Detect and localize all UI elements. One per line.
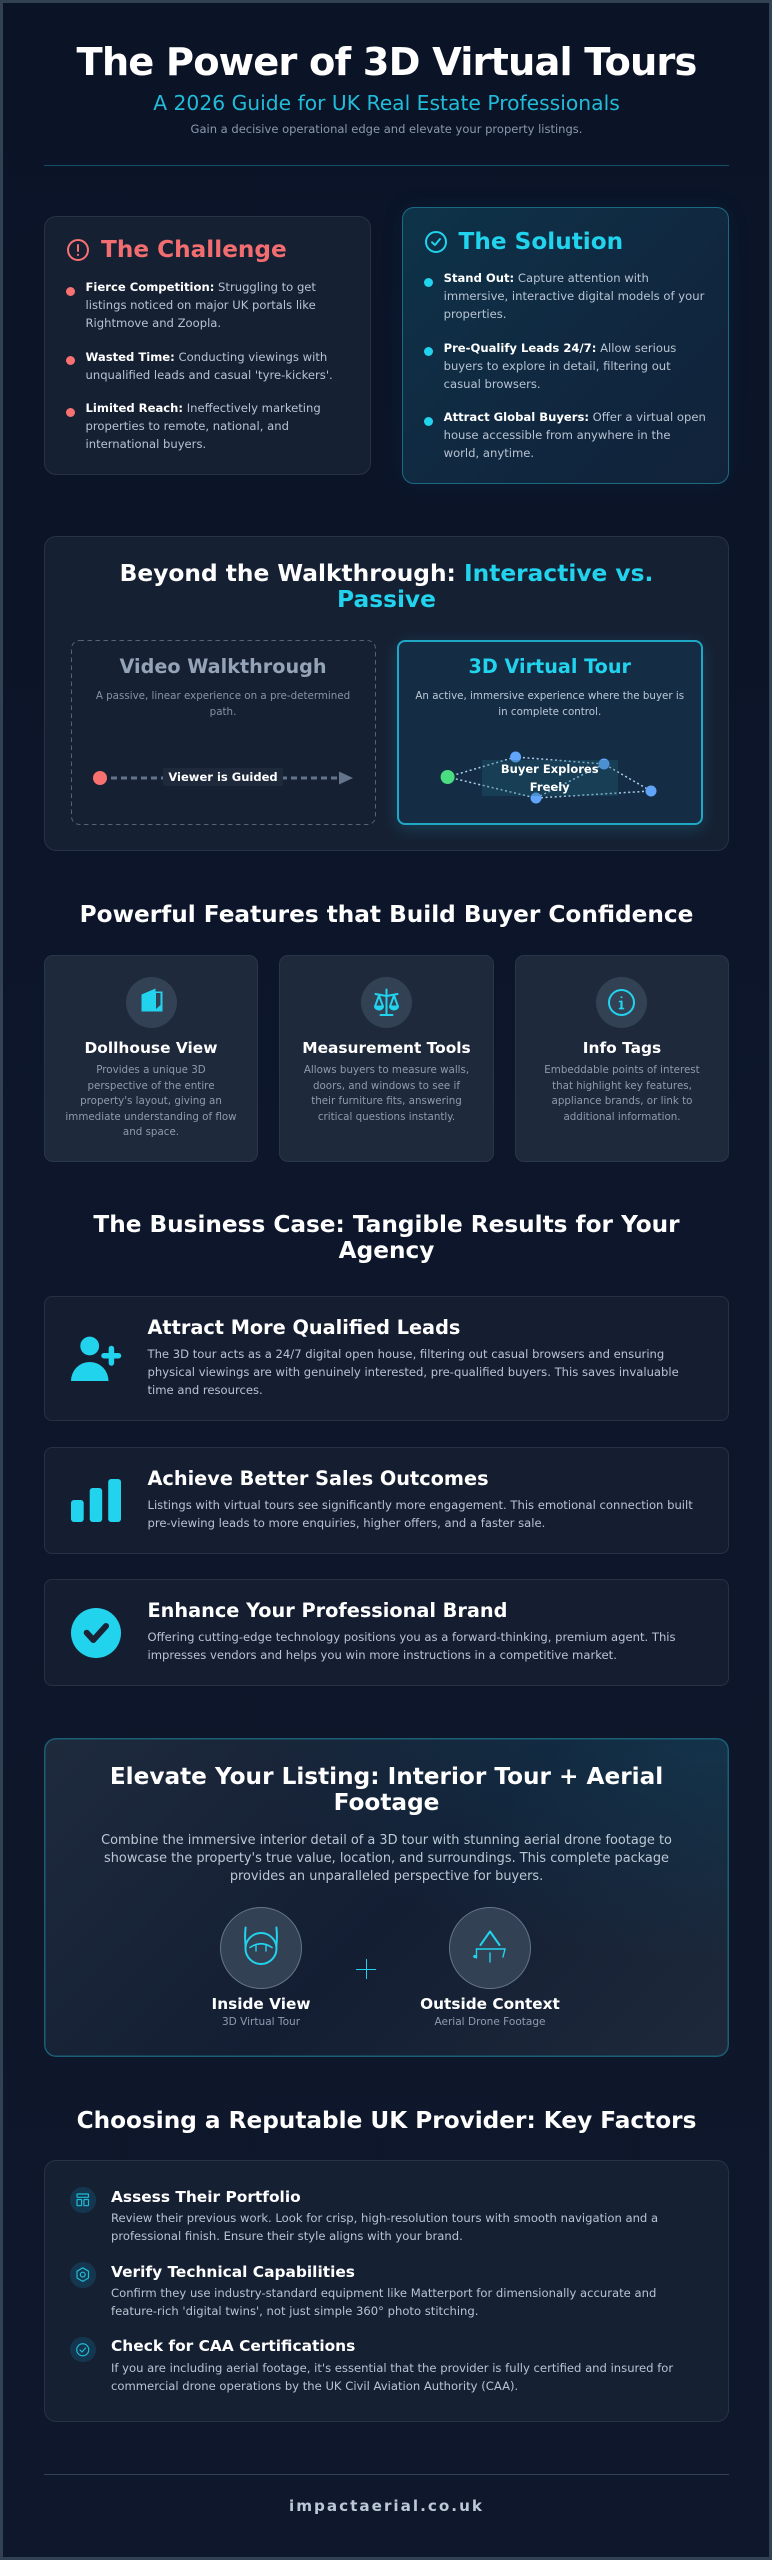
icon: check circle <box>425 231 447 253</box>
description: video walkthrough <box>96 690 350 718</box>
icon: drone <box>449 1907 531 1989</box>
bullet: wasted time: unqualified leads and casual 'tyre-kickers'. <box>86 368 333 382</box>
panel: the challenge <box>44 216 371 475</box>
description <box>65 1064 237 1138</box>
description: Embeddable points of interest <box>544 1064 700 1076</box>
bullet: pre-qualify leads: buyers to explore in detail, filtering out <box>444 359 671 373</box>
factor: assess their portfolio <box>70 2187 658 2243</box>
description: and space. <box>123 1126 179 1138</box>
icon: info <box>596 976 647 1028</box>
panel: the solution <box>402 207 729 484</box>
label: Inside View <box>212 1995 310 2013</box>
title: Info Tags <box>583 1039 661 1057</box>
description <box>111 2286 656 2318</box>
bullet: attract global buyers <box>424 410 706 460</box>
bullet: fierce competition: listings noticed on major UK portals like <box>86 298 316 312</box>
card: measurement tools <box>279 955 494 1162</box>
subtitle: A 2026 Guide for UK Real Estate Professionals <box>153 91 620 115</box>
description: doors, and windows to see if <box>313 1080 460 1092</box>
bullet: limited reach: properties to remote, national, and <box>86 419 289 433</box>
heading: powerful features: Powerful Features that Build Buyer Confidence <box>80 900 693 928</box>
icon: check badge <box>71 1608 121 1658</box>
description: video walkthrough: path. <box>210 706 236 718</box>
title: Assess Their Portfolio <box>111 2188 301 2206</box>
description: 3d virtual tour: in complete control. <box>498 706 601 718</box>
factor: check for caa certifications <box>70 2337 674 2393</box>
bullet: fierce competition: Fierce Competition: Struggling to get <box>86 280 316 294</box>
description: Allows buyers to measure walls, <box>304 1064 469 1076</box>
icon: bar chart <box>71 1479 121 1522</box>
heading: video walkthrough: Video Walkthrough <box>120 655 326 678</box>
footer: website: impactaerial.co.uk <box>289 2497 484 2515</box>
icon: warning circle <box>67 239 89 261</box>
icon: person plus <box>71 1336 122 1381</box>
description: video walkthrough: A passive, linear experience on a pre-determined <box>96 690 350 702</box>
panel: interactive vs passive <box>44 536 729 851</box>
bullet: attract global buyers: world, anytime. <box>444 446 534 460</box>
bullet: pre-qualify leads: casual browsers. <box>444 377 541 391</box>
bullet: fierce competition <box>66 280 316 330</box>
bullet: stand out: Stand Out: Capture attention with <box>444 271 649 285</box>
description: critical questions instantly. <box>318 1110 455 1122</box>
description: 3d virtual tour <box>415 690 684 718</box>
description: provides an unparalleled perspective for buyers. <box>230 1869 543 1884</box>
heading: choosing a provider: Choosing a Reputable UK Provider: Key Factors <box>77 2107 696 2134</box>
item: inside view <box>212 1907 310 2028</box>
description: commercial drone operations by the UK Civil Aviation Authority (CAA). <box>111 2379 518 2393</box>
description: If you are including aerial footage, it's essential that the provider is fully certified and insured for <box>111 2361 673 2375</box>
heading: the challenge: The Challenge <box>101 236 287 263</box>
description: Confirm they use industry-standard equipment like Matterport for dimensionally accurate and <box>111 2286 656 2300</box>
bullet: attract global buyers: house accessible from anywhere in the <box>444 428 670 442</box>
heading: elevate your listing <box>110 1763 663 1816</box>
icon: 3d interior <box>220 1907 302 1989</box>
description: immediate understanding of flow <box>65 1110 237 1122</box>
bullet: pre-qualify leads: Pre-Qualify Leads 24/7: Allow serious <box>444 341 676 355</box>
icon: badge check <box>70 2337 96 2362</box>
description: showcase the property's true value, location, and surroundings. This complete package <box>104 1851 669 1866</box>
description: 3d virtual tour: An active, immersive experience where the buyer is <box>415 690 684 702</box>
title: Attract More Qualified Leads <box>148 1316 460 1339</box>
description: Combine the immersive interior detail of a 3D tour with stunning aerial drone footage to <box>101 1833 672 1848</box>
description <box>148 1498 693 1530</box>
description <box>544 1064 700 1122</box>
sublabel: 3D Virtual Tour <box>222 2016 300 2028</box>
description <box>101 1833 672 1884</box>
heading: beyond the walkthrough: Passive <box>337 586 436 613</box>
label: buyer explores freely <box>482 760 618 796</box>
bullet: limited reach: Limited Reach: Ineffectively marketing <box>86 401 321 415</box>
label: buyer explores freely: Buyer Explores <box>501 762 599 776</box>
description <box>111 2211 658 2243</box>
icon: plus <box>356 1959 376 1979</box>
bullet: limited reach: international buyers. <box>86 437 206 451</box>
card: dollhouse view <box>44 955 258 1162</box>
description: Listings with virtual tours see significantly more engagement. This emotional connection built <box>148 1498 693 1512</box>
bullet: wasted time: Wasted Time: Conducting viewings with <box>86 350 327 364</box>
bullet: stand out <box>424 271 704 321</box>
bullet: stand out: immersive, interactive digital models of your <box>444 289 704 303</box>
icon: layout <box>70 2187 96 2213</box>
card: info tags <box>515 955 729 1162</box>
title: Achieve Better Sales Outcomes <box>148 1467 489 1490</box>
description: pre-viewing leads to more enquiries, higher offers, and a faster sale. <box>148 1516 545 1530</box>
icon: dollhouse <box>126 976 176 1028</box>
panel: interior tour plus aerial footage <box>44 1738 729 2057</box>
panel: video walkthrough <box>71 640 376 825</box>
heading: business case <box>93 1211 680 1264</box>
panel: 3d virtual tour <box>397 640 702 825</box>
title: Verify Technical Capabilities <box>111 2262 355 2280</box>
bullet: attract global buyers: Attract Global Buyers: Offer a virtual open <box>444 410 706 424</box>
title: Check for CAA Certifications <box>111 2337 355 2355</box>
title: Enhance Your Professional Brand <box>148 1599 507 1622</box>
description: Provides a unique 3D <box>96 1064 206 1076</box>
description: time and resources. <box>148 1383 263 1397</box>
description: professional finish. Ensure their style aligns with your brand. <box>111 2229 463 2243</box>
heading: elevate your listing: Footage <box>334 1789 439 1816</box>
item: outside context <box>420 1907 560 2028</box>
card: enhance your professional brand <box>44 1579 729 1686</box>
description <box>148 1630 676 1662</box>
factor: verify technical capabilities <box>70 2262 656 2318</box>
heading: beyond the walkthrough <box>120 560 653 613</box>
description: Offering cutting-edge technology positions you as a forward-thinking, premium agent. This <box>148 1630 676 1644</box>
label: Outside Context <box>420 1995 560 2013</box>
description: appliance brands, or link to <box>552 1095 692 1107</box>
heading: 3d virtual tour: 3D Virtual Tour <box>469 655 631 678</box>
bullet: pre-qualify leads <box>424 341 676 391</box>
heading: business case: The Business Case: Tangible Results for Your <box>93 1211 680 1238</box>
sublabel: Aerial Drone Footage <box>434 2016 546 2028</box>
icon: gear <box>70 2262 96 2288</box>
label: viewer is guided: Viewer is Guided <box>168 770 278 784</box>
description: feature-rich 'digital twins', not just simple 360° photo stitching. <box>111 2304 478 2318</box>
title: Dollhouse View <box>85 1039 217 1057</box>
tagline: Gain a decisive operational edge and elevate your property listings. <box>191 122 582 136</box>
diagram: free exploration network <box>440 752 656 804</box>
description: Review their previous work. Look for crisp, high-resolution tours with smooth navigation and a <box>111 2211 658 2225</box>
bullet: stand out: properties. <box>444 307 506 321</box>
panel: provider factors <box>44 2160 729 2422</box>
heading: beyond the walkthrough: Beyond the Walkthrough: Interactive vs. <box>120 560 653 587</box>
description <box>147 1347 679 1397</box>
description <box>304 1064 469 1122</box>
title: The Power of 3D Virtual Tours <box>77 40 696 85</box>
description: that highlight key features, <box>552 1080 692 1092</box>
heading: the solution: The Solution <box>458 228 623 255</box>
description: property's layout, giving an <box>80 1095 222 1107</box>
description: their furniture fits, answering <box>311 1095 462 1107</box>
card: attract more qualified leads <box>44 1296 729 1421</box>
description: impresses vendors and helps you win more instructions in a competitive market. <box>148 1648 617 1662</box>
description: additional information. <box>563 1110 681 1122</box>
description: The 3D tour acts as a 24/7 digital open house, filtering out casual browsers and ensuring <box>148 1347 664 1361</box>
bullet: fierce competition: Rightmove and Zoopla. <box>86 316 221 330</box>
description: perspective of the entire <box>87 1080 215 1092</box>
card: achieve better sales outcomes <box>44 1447 729 1554</box>
title: Measurement Tools <box>302 1039 471 1057</box>
description <box>111 2361 674 2393</box>
icon: scales <box>360 976 412 1028</box>
label: buyer explores freely: Freely <box>530 780 570 794</box>
bullet: wasted time <box>66 350 333 382</box>
heading: business case: Agency <box>339 1237 434 1264</box>
bullet: limited reach <box>66 401 321 451</box>
description: physical viewings are with genuinely interested, pre-qualified buyers. This saves invaluable <box>148 1365 679 1379</box>
diagram: guided linear path <box>93 768 353 786</box>
heading: elevate your listing: Elevate Your Listing: Interior Tour + Aerial <box>110 1763 663 1790</box>
